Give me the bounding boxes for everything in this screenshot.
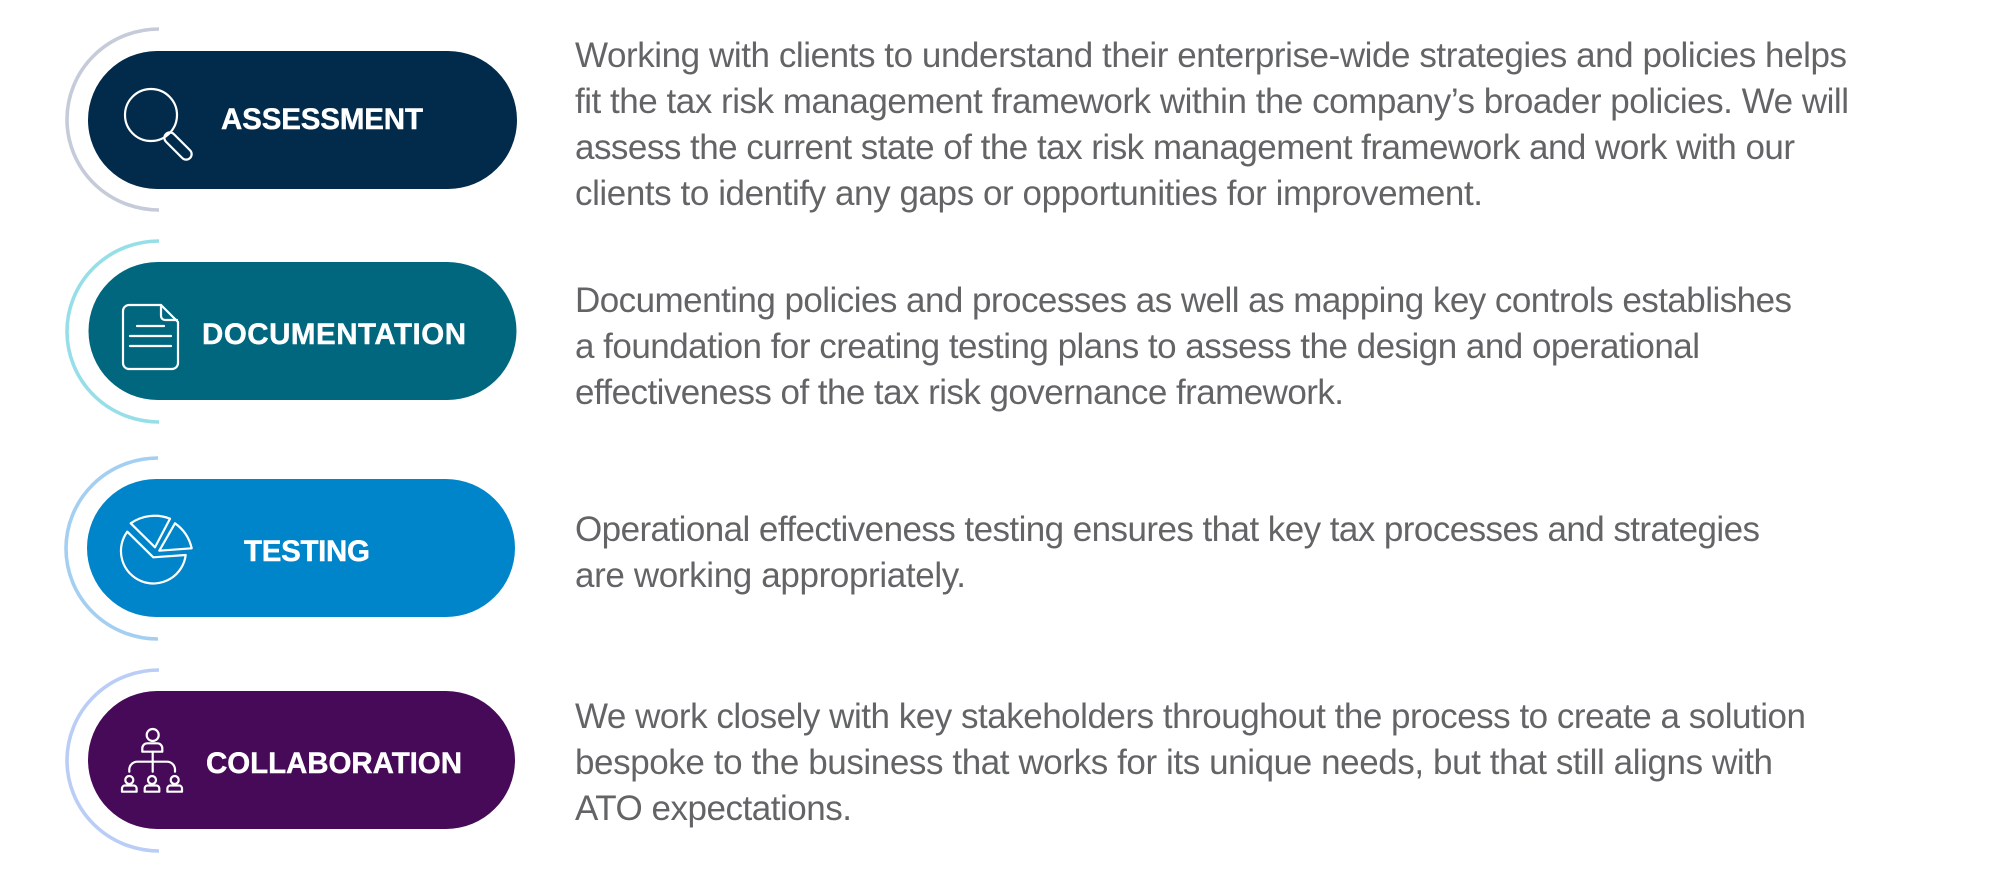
arc: testing (66, 458, 158, 639)
icon: organisation chart (122, 729, 182, 792)
text block: collaboration: bespoke to the business that works for its unique needs, but that still aligns with (575, 743, 1773, 782)
label: assessment: ASSESSMENT (221, 103, 423, 136)
text block: collaboration (575, 697, 1806, 828)
text block: testing (575, 510, 1760, 595)
text block: assessment: clients to identify any gaps or opportunities for improvement. (575, 174, 1483, 213)
text block: assessment: fit the tax risk management framework within the company’s broader policies. We will (575, 82, 1849, 121)
text block: testing: are working appropriately. (575, 556, 966, 595)
label: collaboration: COLLABORATION (206, 747, 462, 780)
text block: documentation: Documenting policies and processes as well as mapping key controls establishes (575, 281, 1792, 320)
arc: documentation (67, 241, 159, 422)
icon: magnifying glass (125, 89, 194, 162)
text block: testing: Operational effectiveness testing ensures that key tax processes and strategies (575, 510, 1760, 549)
panel: collaboration (67, 670, 1806, 851)
pill: collaboration (88, 691, 515, 829)
icon: pie chart (121, 516, 192, 584)
arc: assessment (67, 29, 159, 210)
icon: document (123, 305, 178, 369)
text block: assessment: Working with clients to understand their enterprise-wide strategies and policies helps (575, 36, 1847, 75)
arc: collaboration (67, 670, 159, 851)
text block: documentation: a foundation for creating testing plans to assess the design and operational (575, 327, 1700, 366)
pill: assessment (88, 51, 517, 189)
text block: assessment (575, 36, 1849, 213)
panel: documentation (67, 241, 1792, 422)
label: documentation: DOCUMENTATION (202, 318, 466, 351)
text block: collaboration: ATO expectations. (575, 789, 852, 828)
label: testing: TESTING (244, 535, 370, 568)
pill: testing (87, 479, 515, 617)
pill: documentation (88, 262, 516, 400)
text block: collaboration: We work closely with key stakeholders throughout the process to create a solution (575, 697, 1806, 736)
text block: assessment: assess the current state of the tax risk management framework and work with our (575, 128, 1795, 167)
panel: testing (66, 458, 1760, 639)
text block: documentation: effectiveness of the tax risk governance framework. (575, 373, 1344, 412)
panel: assessment (67, 29, 1849, 213)
text block: documentation (575, 281, 1792, 412)
